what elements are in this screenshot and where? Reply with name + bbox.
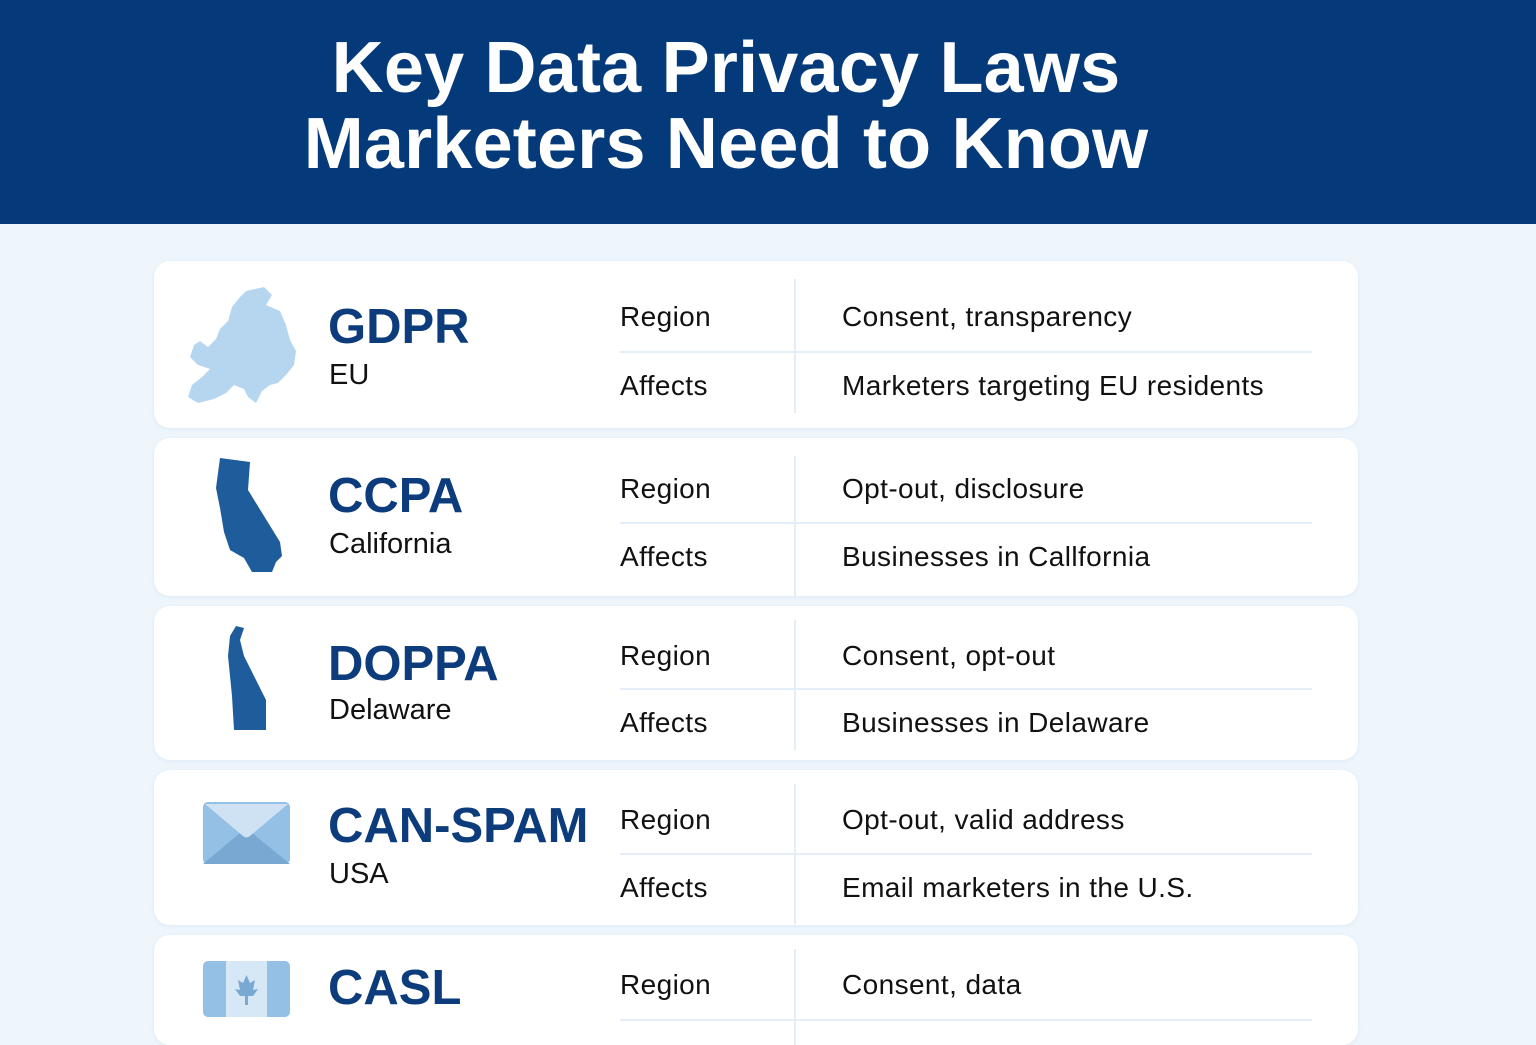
title: Key Data Privacy Laws (332, 28, 1120, 108)
icon: Europe map (188, 287, 296, 403)
icon: California (216, 458, 282, 572)
icon: Canada flag (203, 961, 290, 1017)
row: affects: Affects (620, 541, 708, 572)
row: affects: Affects (620, 370, 708, 401)
panel: CAN-SPAM (154, 770, 1358, 925)
icon: Delaware (228, 626, 266, 730)
value: region: Consent, opt-out (842, 640, 1055, 671)
panel: GDPR (154, 261, 1358, 428)
value: affects: Businesses in Callfornia (842, 541, 1150, 572)
panel: CASL (154, 935, 1358, 1045)
icon: envelope (203, 802, 290, 864)
value: affects: Businesses in Delaware (842, 707, 1150, 738)
law name: GDPR (328, 300, 470, 354)
region name: Delaware (329, 694, 452, 726)
panel: DOPPA (154, 606, 1358, 760)
value: affects: Marketers targeting EU residents (842, 370, 1264, 401)
row: region: Region (620, 969, 711, 1000)
value: affects: Email marketers in the U.S. (842, 872, 1194, 903)
header band (0, 0, 1536, 224)
value: region: Opt-out, valid address (842, 804, 1125, 835)
row: region: Region (620, 473, 711, 504)
title: Marketers Need to Know (304, 104, 1148, 184)
panel: CCPA (154, 438, 1358, 596)
title (304, 28, 1148, 184)
region name: California (329, 528, 452, 560)
row: region: Region (620, 640, 711, 671)
row: affects: Affects (620, 872, 708, 903)
row: region: Region (620, 301, 711, 332)
law name: CAN-SPAM (328, 799, 588, 853)
region name: USA (329, 858, 389, 890)
value: region: Consent, data (842, 969, 1022, 1000)
law name: DOPPA (328, 637, 499, 691)
row: affects: Affects (620, 707, 708, 738)
value: region: Opt-out, disclosure (842, 473, 1085, 504)
row: region: Region (620, 804, 711, 835)
law name: CCPA (328, 469, 463, 523)
region name: EU (329, 359, 369, 391)
law name: CASL (328, 961, 461, 1015)
value: region: Consent, transparency (842, 301, 1132, 332)
